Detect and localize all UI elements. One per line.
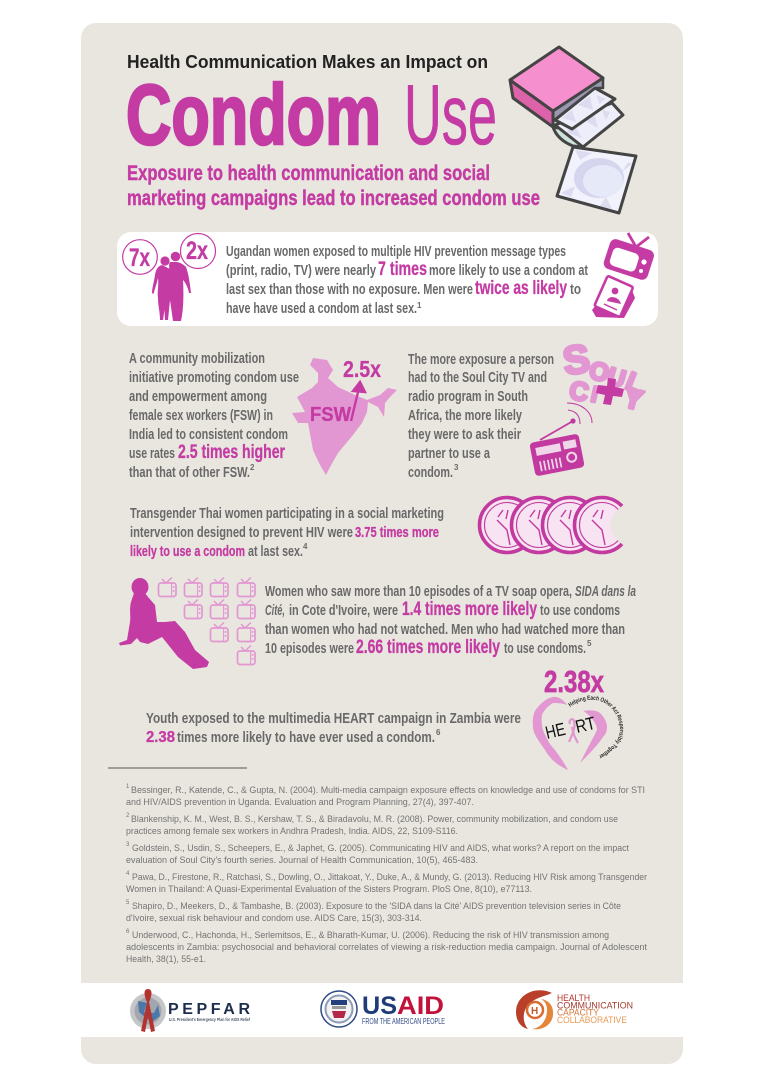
references: 3 <box>126 842 130 848</box>
references: Pawa, D., Firestone, R., Ratchasi, S., Dowling, O., Jittakoat, Y., Duke, A., & Mundy, G. (2013). Reducing HIV Risk among Transgender <box>132 872 648 883</box>
icon: Soul City logo: U <box>604 363 628 394</box>
text block: Cote d'Ivoire: 1.4 times more likely <box>402 599 537 620</box>
icon: India map <box>292 356 397 475</box>
icon: radio <box>529 403 592 476</box>
references: 5 <box>126 900 130 906</box>
title: Condom <box>126 68 381 163</box>
references: and HIV/AIDS prevention in Uganda. Evaluation and Program Planning, 27(4), 397-407. <box>126 797 474 808</box>
text block: India: India led to consistent condom <box>129 426 288 443</box>
text block: Cote d'Ivoire: Cité, <box>265 602 285 619</box>
text block: Soul City: had to the Soul City TV and <box>408 369 547 386</box>
icon: HEART logo: RT <box>573 713 597 737</box>
references: evaluation of Soul City's fourth series. Journal of Health Communication, 10(5), 465-483. <box>126 855 478 866</box>
logo: Health Communication Capacity Collaborative <box>516 990 633 1029</box>
text block: India: use rates <box>129 445 175 462</box>
text block: India: 2 <box>250 463 255 472</box>
icon: tv grid <box>158 578 255 664</box>
logo: USAID: US <box>362 992 397 1020</box>
logo: Health Communication Capacity Collaborative: HEALTH <box>557 993 590 1004</box>
text block: Cote d'Ivoire: to use condoms. <box>504 640 586 657</box>
subtitle: marketing campaigns lead to increased condom use <box>127 186 540 210</box>
text block: Soul City: they were to ask their <box>408 426 521 443</box>
references: practices among female sex workers in Andhra Pradesh, India. AIDS, 22, S109-S116. <box>126 826 458 837</box>
references: Women in Thailand: A Quasi-Experimental Evaluation of the Sisters Program. PloS One, 8(10), e77113. <box>126 884 532 895</box>
references: d'Ivoire, sexual risk behaviour and condom use. AIDS Care, 15(3), 303-314. <box>126 913 422 924</box>
text block: Cote d'Ivoire: 2.66 times more likely <box>356 637 500 658</box>
text block: Uganda <box>226 243 588 317</box>
icon: Soul City logo <box>560 337 648 416</box>
footer band <box>81 983 683 1037</box>
icon: 2x circle <box>180 234 216 268</box>
stat: 2.38x: 2.38x <box>544 664 605 699</box>
text block: Uganda: 7 times <box>378 259 427 280</box>
icon: 7x circle: 7x <box>129 244 150 272</box>
references: Health, 38(1), 55-e1. <box>126 954 206 965</box>
logo: USAID: FROM THE AMERICAN PEOPLE <box>362 1017 445 1026</box>
text block: India: initiative promoting condom use <box>129 369 299 386</box>
logo: PEPFAR <box>130 989 250 1032</box>
text block: Cote d'Ivoire: than women who had not watched. Men who had watched more than <box>265 621 625 638</box>
panel: page background <box>81 23 683 1064</box>
icon: seated woman <box>119 578 209 669</box>
references: Shapiro, D., Meekers, D., & Tambashe, B. (2003). Exposure to the 'SIDA dans la Cité' AIDS prevention television series in Côte <box>132 901 621 912</box>
references: Blankenship, K. M., West, B. S., Kershaw, T. S., & Biradavolu, M. R. (2008). Power, community mobilization, and condom use <box>131 814 618 825</box>
icon: Soul City logo: O <box>587 356 612 388</box>
icon: Soul City logo: Y <box>621 382 646 416</box>
icon: Soul City logo: L <box>622 366 648 400</box>
icon: Soul City logo: S <box>560 337 593 384</box>
text block: Cote d'Ivoire <box>265 583 636 658</box>
icon: HEART logo: HE <box>543 719 567 743</box>
icon: Soul City logo: I <box>589 381 600 407</box>
text block: Soul City <box>408 351 554 481</box>
icon: India map: FSW <box>310 404 351 426</box>
logo: USAID <box>321 991 445 1027</box>
logo: Health Communication Capacity Collaborative: COLLABORATIVE <box>557 1015 627 1026</box>
icon: HEART logo: Helping Each Other Act Responsibly Together <box>568 696 624 758</box>
text block: Uganda: more likely to use a condom at <box>429 262 588 279</box>
icon: tv and magazine <box>592 233 656 318</box>
icon: India map: 2.5x <box>343 356 381 382</box>
text block: Soul City: partner to use a <box>408 445 490 462</box>
text block: Uganda: twice as likely <box>475 278 567 299</box>
logo: Health Communication Capacity Collaborative: COMMUNICATION <box>557 1000 633 1012</box>
icon: 7x circle <box>123 240 157 274</box>
divider rule <box>108 768 247 769</box>
text block: Uganda: 1 <box>417 301 422 310</box>
text block: Soul City: Africa, the more likely <box>408 407 522 424</box>
text block: Uganda: Ugandan women exposed to multiple HIV prevention message types <box>226 243 566 260</box>
text block: Thailand: intervention designed to prevent HIV were <box>130 524 353 541</box>
text block: Soul City: radio program in South <box>408 388 528 405</box>
text block: Thailand: 4 <box>303 542 308 551</box>
text block: Zambia: 2.38 <box>146 729 175 746</box>
arrow <box>351 382 365 421</box>
logo: Health Communication Capacity Collaborative: CAPACITY <box>557 1008 600 1018</box>
text block: Thailand: 3.75 times more <box>355 524 439 541</box>
references: Goldstein, S., Usdin, S., Scheepers, E., & Japhet, G. (2005). Communicating HIV and AIDS, what works? A report on the impact <box>132 843 629 854</box>
logo: USAID: AID <box>397 992 444 1020</box>
text block: Cote d'Ivoire: SIDA dans la <box>575 583 636 600</box>
text block: Thailand <box>130 505 444 560</box>
text block: Cote d'Ivoire: to use condoms <box>540 602 620 619</box>
text block: Thailand: likely to use a condom <box>130 543 245 560</box>
text block: Zambia: Youth exposed to the multimedia HEART campaign in Zambia were <box>146 710 521 727</box>
subtitle: Exposure to health communication and social <box>127 161 490 185</box>
text block: Cote d'Ivoire: in Cote d'Ivoire, were <box>289 602 398 619</box>
references: 2 <box>126 813 130 819</box>
text block: Uganda: last sex than those with no exposure. Men were <box>226 281 473 298</box>
references: Bessinger, R., Katende, C., & Gupta, N. (2004). Multi-media campaign exposure effects on knowledge and use of condoms for STI <box>131 785 645 796</box>
text block: India <box>129 350 299 481</box>
icon: HEART logo <box>532 696 624 770</box>
text block: Cote d'Ivoire: 10 episodes were <box>265 640 354 657</box>
panel: Uganda <box>117 232 658 326</box>
text block: Uganda: to <box>570 281 581 298</box>
text block: India: and empowerment among <box>129 388 267 405</box>
logo: Health Communication Capacity Collaborative: H <box>531 1006 538 1017</box>
text block: Soul City: condom. <box>408 464 453 481</box>
heading: kicker: Health Communication Makes an Impact on <box>127 52 488 72</box>
icon: condom discs <box>480 498 640 552</box>
references <box>126 784 648 965</box>
references: 6 <box>126 929 130 935</box>
text block: India: female sex workers (FSW) in <box>129 407 273 424</box>
title: Use <box>404 68 497 163</box>
icon: couple <box>152 252 191 321</box>
logo: PEPFAR: PEPFAR <box>168 1001 250 1018</box>
references: 1 <box>126 784 130 790</box>
text block: Thailand: at last sex. <box>248 543 303 560</box>
text block: Soul City: 3 <box>454 463 459 472</box>
text block: India: A community mobilization <box>129 350 265 367</box>
text block: Cote d'Ivoire: Women who saw more than 10 episodes of a TV soap opera, <box>265 583 572 600</box>
icon: Soul City logo: C <box>567 375 592 408</box>
icon: condom box <box>510 47 636 213</box>
text block: Zambia <box>146 710 521 746</box>
text block: Thailand: Transgender Thai women participating in a social marketing <box>130 505 444 522</box>
subtitle <box>127 161 540 210</box>
text block: Uganda: have have used a condom at last sex. <box>226 300 417 317</box>
text block: Uganda: (print, radio, TV) were nearly <box>226 262 376 279</box>
text block: India: 2.5 times higher <box>178 442 285 463</box>
text block: Zambia: times more likely to have ever used a condom. <box>177 729 435 746</box>
icon: 2x circle: 2x <box>186 237 208 265</box>
text block: India: than that of other FSW. <box>129 464 250 481</box>
text block: Soul City: The more exposure a person <box>408 351 554 368</box>
references: 4 <box>126 871 130 877</box>
logo: PEPFAR: U.S. President's Emergency Plan for AIDS Relief <box>169 1017 250 1022</box>
references: Underwood, C., Hachonda, H., Serlemitsos, E., & Bharath-Kumar, U. (2006). Reducing the risk of HIV transmission among <box>132 930 609 941</box>
text block: Zambia: 6 <box>436 728 441 737</box>
references: adolescents in Zambia: psychosocial and behavioral correlates of viewing a risk-reduction media campaign. Journal of Adolescent <box>126 942 647 953</box>
text block: Cote d'Ivoire: 5 <box>587 639 592 648</box>
